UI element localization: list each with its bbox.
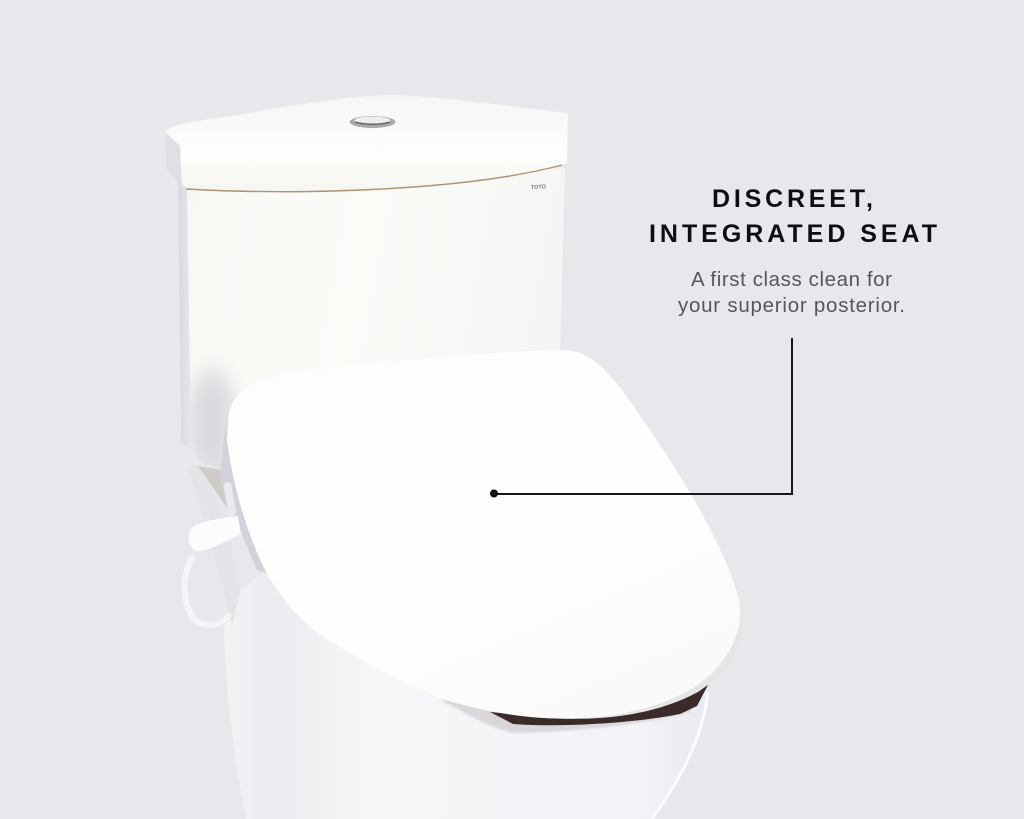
toilet seat lid <box>227 350 742 719</box>
seat hinge and hose <box>185 427 272 625</box>
flush button <box>350 116 396 128</box>
description text: your superior posterior. <box>678 294 905 317</box>
tank lid <box>165 95 568 192</box>
bowl <box>224 570 709 819</box>
callout leader line <box>490 338 792 498</box>
description text <box>678 268 905 317</box>
heading <box>649 185 937 248</box>
tank body <box>178 168 565 480</box>
infographic canvas <box>165 95 937 819</box>
brand mark: TOTO <box>531 184 547 191</box>
callout dot <box>490 490 498 498</box>
toilet illustration <box>165 95 742 819</box>
heading: DISCREET, <box>712 185 873 213</box>
heading: INTEGRATED SEAT <box>649 220 937 248</box>
description text: A first class clean for <box>691 268 892 291</box>
